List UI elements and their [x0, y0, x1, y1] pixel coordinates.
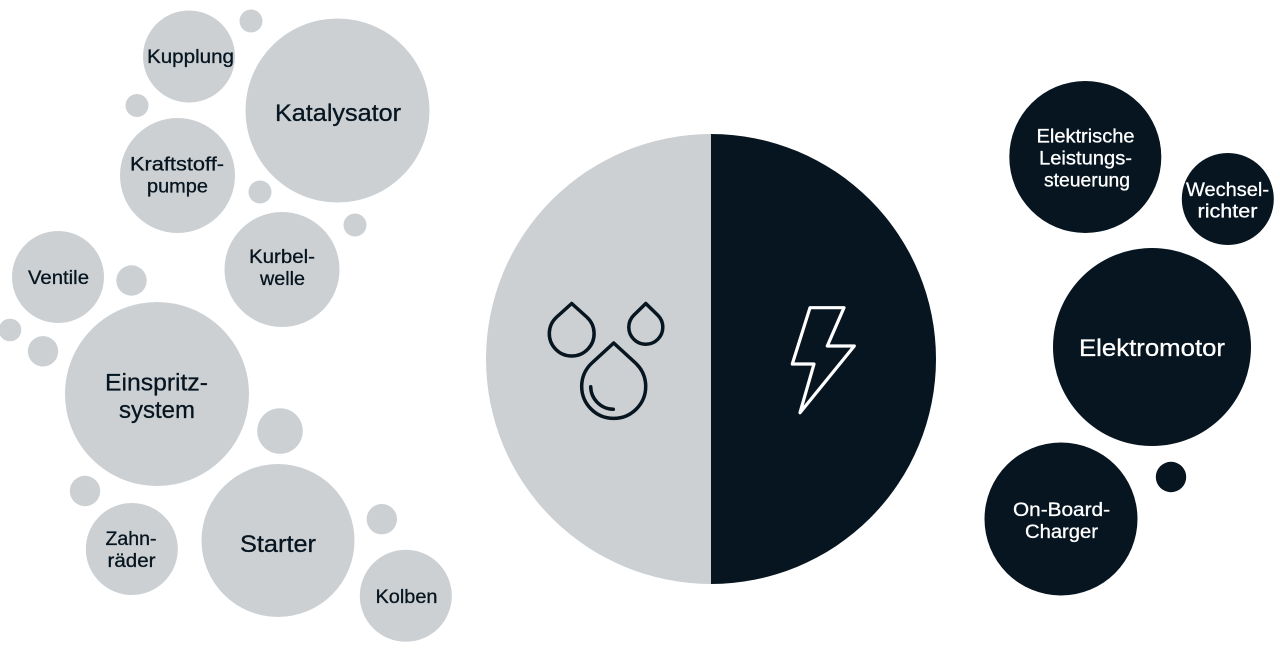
small decorative bubbles [0, 10, 397, 534]
left half: combustion [486, 134, 711, 584]
bubble: Zahnräder: räder [108, 551, 156, 572]
bubble: On-Board-Charger: Charger [1025, 522, 1099, 543]
bubble: Wechselrichter: Wechsel- [1186, 180, 1269, 201]
bubble: Zahnräder: Zahn- [106, 529, 156, 550]
bubble: Elektrische Leistungssteuerung: Elektrische [1036, 126, 1134, 148]
bubble: Kolben [360, 550, 452, 642]
bubble: On-Board-Charger [984, 442, 1138, 596]
bubble: Ventile [12, 231, 104, 323]
bubble: Kurbelwelle: Kurbel- [249, 247, 315, 268]
bubble: Kurbelwelle [224, 212, 340, 327]
central circle: combustion vs electric [486, 134, 936, 584]
bubble: Elektrische Leistungssteuerung: steuerung [1044, 170, 1130, 192]
bubble: Katalysator: Katalysator [275, 100, 401, 127]
icon: fuel drops [549, 304, 663, 418]
bubble: Starter [202, 464, 354, 617]
bubble: Kraftstoffpumpe: Kraftstoff- [130, 154, 224, 176]
bubble: Elektrische Leistungssteuerung: Leistungs- [1039, 148, 1132, 170]
bubble: Starter: Starter [240, 531, 316, 558]
bubble: Katalysator [246, 18, 430, 202]
bubble: Kurbelwelle: welle [259, 269, 305, 290]
bubble: On-Board-Charger: On-Board- [1013, 500, 1110, 521]
bubble: Kupplung [143, 10, 235, 102]
bubble: Kolben: Kolben [376, 587, 438, 608]
panel: electric drive bubbles [984, 81, 1274, 596]
bubble: Ventile: Ventile [28, 268, 89, 289]
bubble: Kraftstoffpumpe: pumpe [147, 176, 208, 198]
bubble: Kraftstoffpumpe [120, 118, 235, 233]
bubble: Elektromotor: Elektromotor [1079, 335, 1225, 362]
right half: electric [711, 134, 936, 584]
bubble: Wechselrichter: richter [1198, 202, 1258, 222]
panel: combustion engine bubbles [0, 10, 452, 642]
bubble: Einspritzsystem: Einspritz- [105, 370, 208, 396]
bubble: Einspritzsystem [65, 302, 249, 486]
bubble: Elektrische Leistungssteuerung [1009, 81, 1161, 233]
bubble: Kupplung: Kupplung [147, 47, 234, 68]
small decorative bubble [1156, 462, 1186, 492]
bubble: Wechselrichter [1182, 153, 1274, 245]
bubble: Elektromotor [1053, 248, 1251, 446]
icon: lightning bolt [792, 308, 854, 413]
bubble: Zahnräder [86, 503, 178, 595]
bubble: Einspritzsystem: system [119, 397, 195, 424]
